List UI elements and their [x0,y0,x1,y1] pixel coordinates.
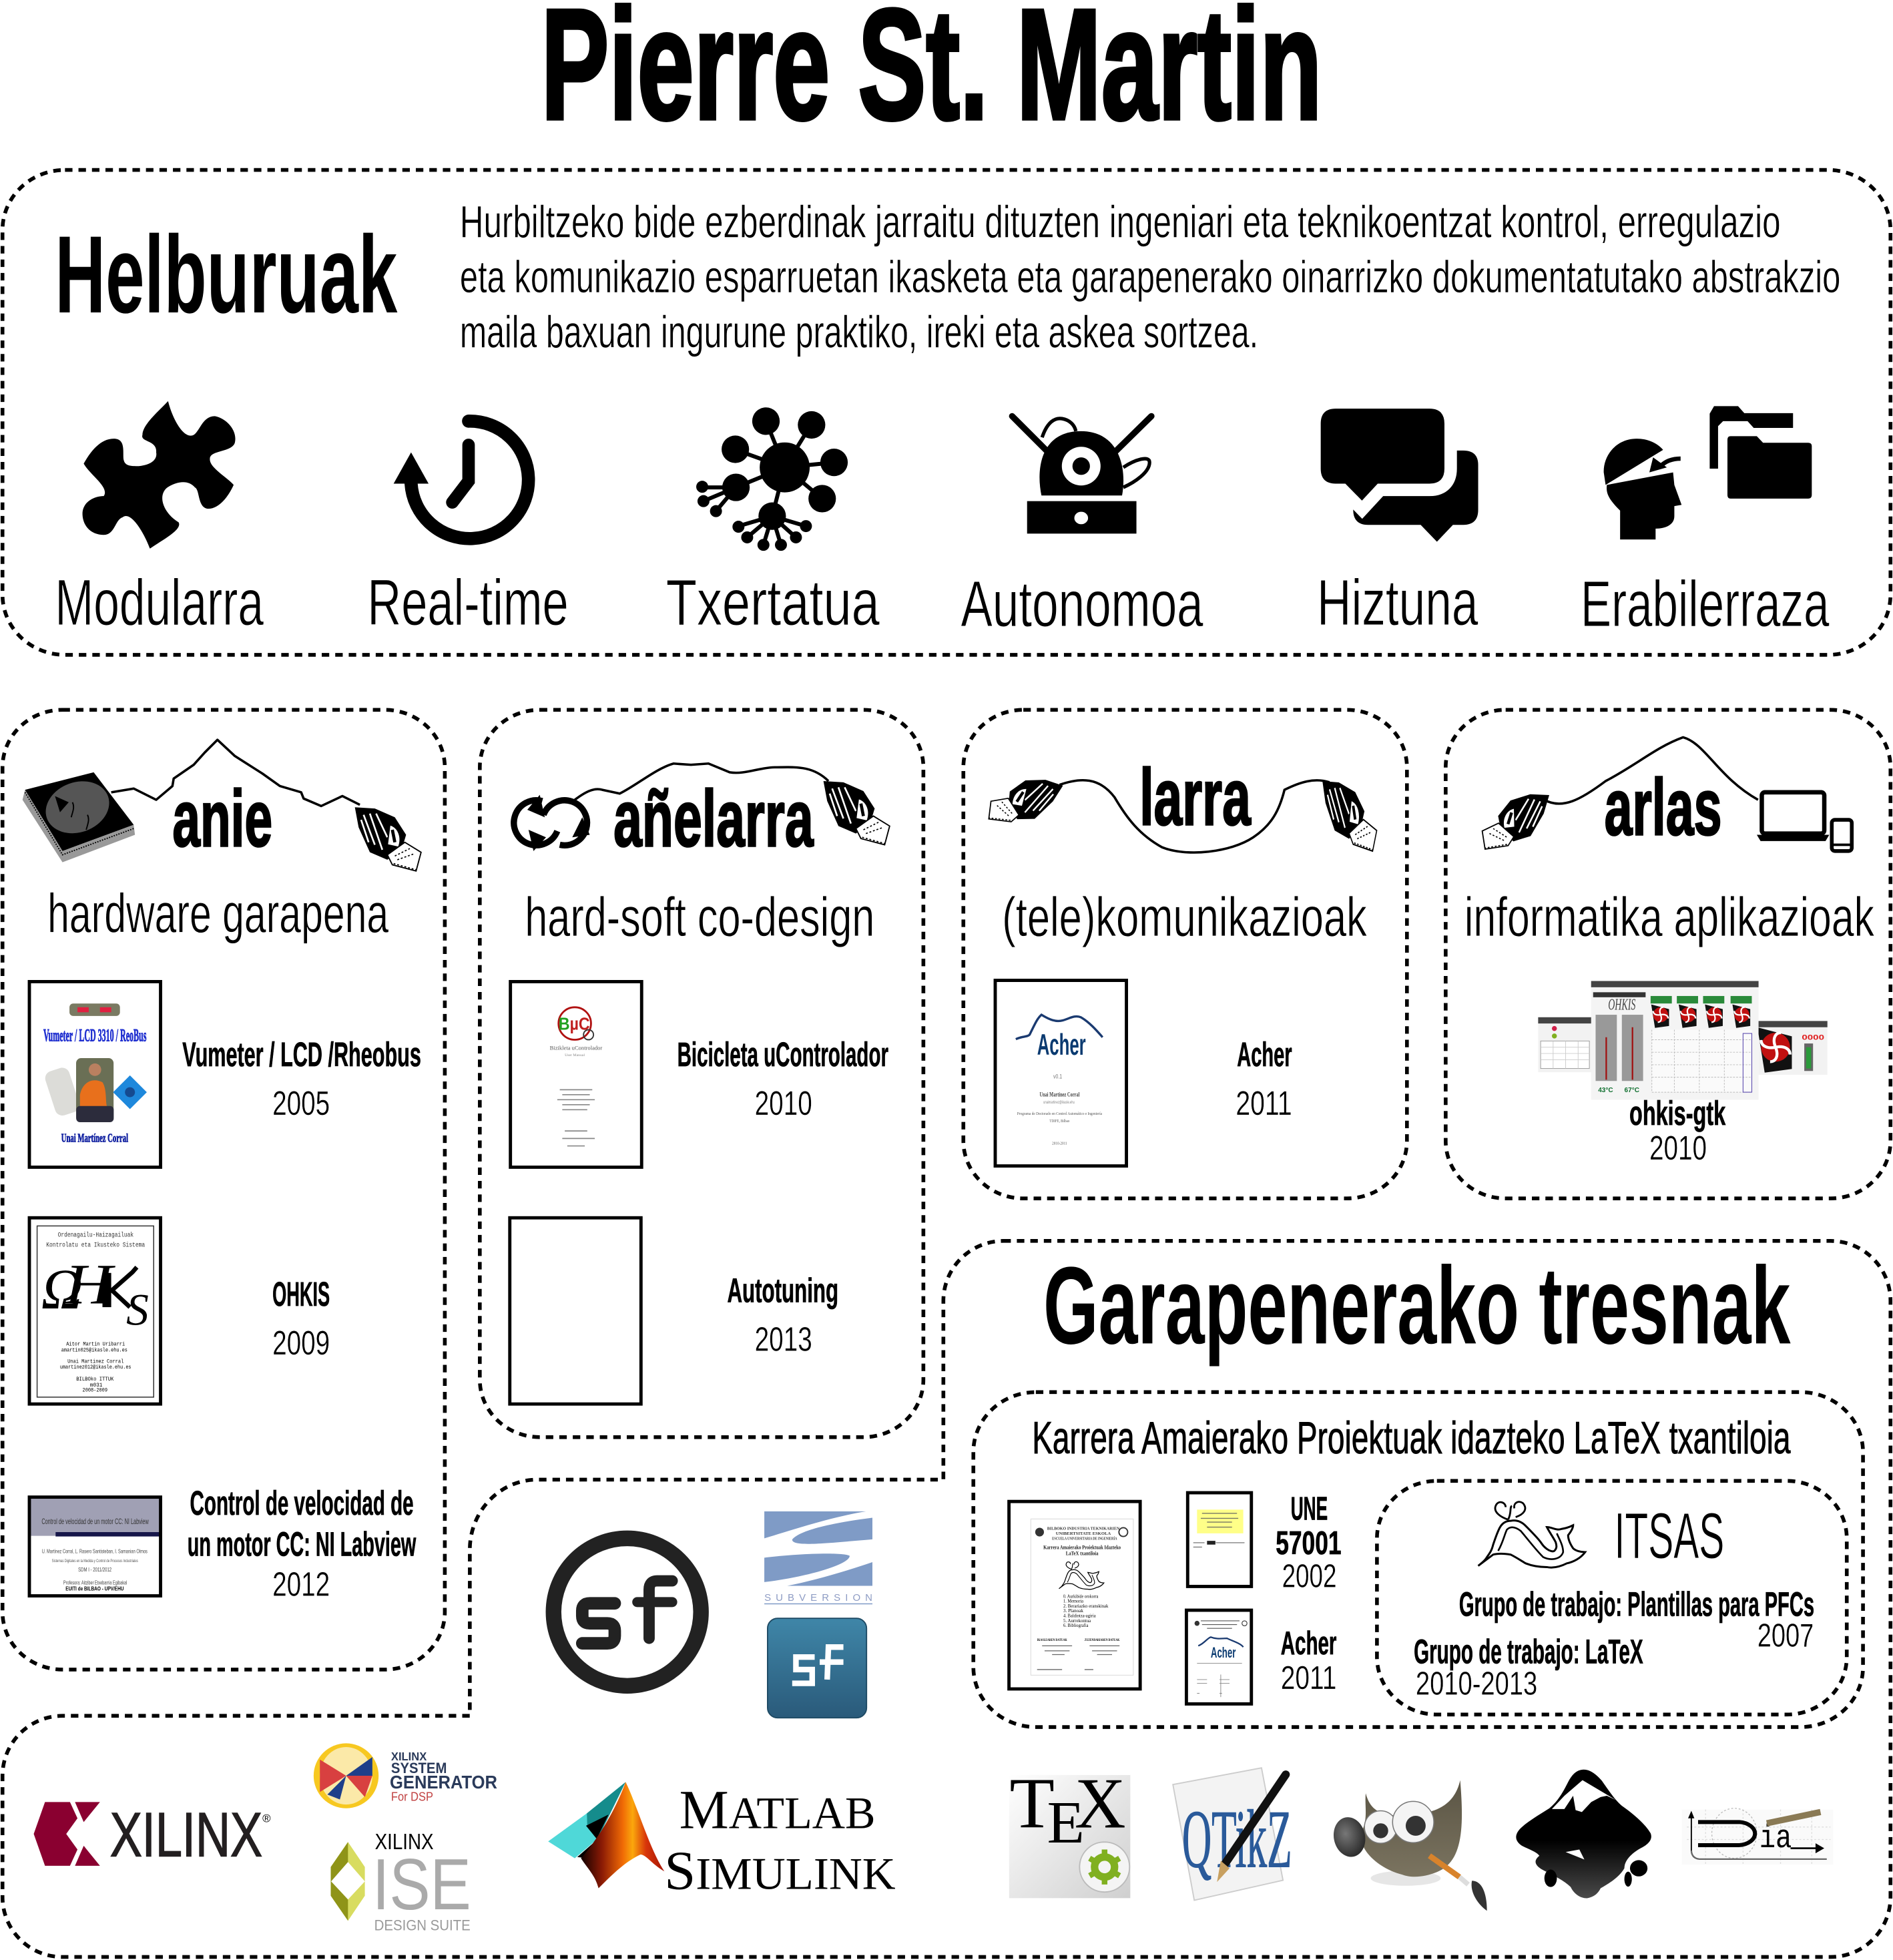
panel: arlas [1446,710,1890,1198]
icon: connector plug left [1480,788,1549,855]
text: 2010-2013: 2010-2013 [1416,1666,1537,1702]
logo: Xilinx: ® [262,1812,271,1824]
subheading: hardware garapena: hardware garapena [47,883,388,944]
item label: Vumeter: Vumeter / LCD /Rheobus [182,1035,421,1073]
screenshot: ohkis-gtk [1538,981,1828,1099]
item label: Acher: Acher [1281,1626,1336,1662]
book cover: Bicicleta uControlador [511,981,641,1167]
book cover: OHKIS: Ω [41,1257,83,1321]
cable: añelarra [575,764,828,800]
book cover: Vumeter: Unai Martínez Corral [61,1132,128,1145]
logo: TeX [1009,1764,1130,1898]
icon: chip [23,772,135,863]
icon: robot [1012,416,1151,533]
item label: Vumeter: 2005 [272,1084,330,1122]
logo: TeX: E [1047,1790,1085,1856]
screenshot: ohkis-gtk: 43°C [1598,1087,1613,1094]
document: large template page: 0. Aurkibide orokorra [1063,1594,1099,1599]
icon: clock with arrow [394,421,529,539]
icon: head and folders [1604,406,1812,539]
item label: Bicicleta uControlador: 2010 [755,1084,812,1122]
labels: feature names [55,566,1830,640]
document: large template page: LaTeX txantiloia [1066,1550,1099,1557]
logo: Matlab Simulink: MATLAB [680,1779,875,1840]
book cover: Bicicleta uControlador: B [559,1014,570,1034]
book cover: Vumeter [29,981,161,1167]
book cover: Acher: Unai Martinez Corral [1039,1092,1080,1099]
icon: network nodes [696,407,848,551]
logo: TeX: T [1010,1764,1055,1844]
heading: añelarra: añelarra [613,774,814,863]
icon: connector plug [355,807,421,871]
document: UNE page [1187,1493,1252,1586]
logo: Xilinx System Generator: XILINX [391,1750,427,1763]
logo: Xilinx System Generator: SYSTEM [391,1760,447,1776]
book cover: Control de velocidad: U. Martínez Corral, L. Rasero Santisteban, I. Samanian Olmos [42,1548,148,1554]
item label: Acher: 2011 [1281,1660,1336,1696]
book cover: OHKIS: umartinez012@ikasle.ehu.es [60,1364,131,1371]
item label: Acher [1281,1626,1336,1696]
book cover: OHKIS: S [126,1284,149,1334]
book cover: OHKIS: Ordenagailu-Haizagailuak [58,1231,133,1239]
item label: Bicicleta uControlador [678,1035,888,1122]
text: 2007: 2007 [1757,1618,1814,1654]
item label: Bicicleta uControlador: Bicicleta uControlador [678,1035,888,1073]
labels: feature names: Real-time [367,566,569,639]
item label: Control de velocidad: un motor CC: NI Labview [188,1525,417,1563]
item label: UNE 57001: 2002 [1282,1558,1336,1594]
book cover: Vumeter: Vumeter / LCD 3310 / ReoBus [43,1025,146,1045]
document: large template page: 4. Baldintza-agiria [1063,1614,1096,1619]
item label: Acher: 2011 [1236,1084,1292,1122]
book cover: Control de velocidad: Profesora: Aitziber Etxebarria Egibakal [63,1579,127,1585]
book cover: Bicicleta uControlador: µC [570,1014,590,1034]
subheading: (tele)komunikazioak: (tele)komunikazioak [1002,887,1368,948]
heading: anie: anie [172,774,272,863]
panel: anie [3,710,445,1670]
item label: OHKIS: 2009 [272,1324,330,1362]
item label: Autotuning: 2013 [755,1320,812,1359]
logo: Xilinx [34,1800,271,1870]
book cover: Control de velocidad: Control de velocidad de un motor CC: NI Labview [41,1517,149,1526]
book cover: OHKIS: 2008-2009 [83,1387,107,1393]
logo: Dia [1682,1808,1833,1865]
panel: Garapenerako tresnak [3,1241,1890,1957]
icon: laptop and phone [1757,792,1852,851]
book cover: OHKIS: m031 [90,1382,102,1389]
logo: Subversion: SUBVERSION [764,1592,872,1604]
document: Acher template page [1186,1610,1252,1704]
document: large template page: UNIBERTSITATE ESKOLA [1056,1531,1111,1536]
panel: larra [963,710,1407,1198]
item label: ohkis-gtk: 2010 [1649,1129,1707,1167]
text: LaTeX group: Grupo de trabajo: LaTeX [1414,1633,1643,1671]
document: large template page: IKASLEAREN DATUAK [1037,1638,1067,1642]
labels: feature names: Autonomoa [961,567,1203,640]
book cover: Bicicleta uControlador: User Manual [565,1053,585,1057]
text block: objectives [460,198,1840,357]
logo: Xilinx ISE: ISE [372,1845,471,1925]
panel: añelarra [480,710,923,1437]
document: large template page: 1. Memoria [1063,1599,1084,1604]
cable: anie [111,740,360,806]
document: large template page [1009,1501,1140,1689]
logo: Xilinx ISE [331,1830,471,1934]
icon: connector plug left [985,763,1063,840]
book cover: Acher: Acher [1037,1027,1086,1061]
item label: Acher [1236,1035,1292,1122]
panel: LaTeX template [973,1392,1863,1727]
book cover: Acher: 2010-2011 [1052,1142,1067,1146]
logo: Matlab Simulink [548,1779,896,1901]
icon: circular arrows [514,795,590,851]
logo: Xilinx ISE: DESIGN SUITE [374,1917,471,1934]
document: large template page: 3. Planoak [1063,1608,1083,1614]
item label: UNE 57001 [1276,1491,1342,1594]
labels: feature names: Hiztuna [1317,566,1478,639]
cable: larra [1059,780,1330,852]
heading: arlas: arlas [1605,763,1722,852]
item label: OHKIS [272,1275,330,1362]
item label: Autotuning [727,1272,838,1359]
logo: Matlab Simulink: SIMULINK [664,1840,896,1901]
icon: speech bubbles [1321,409,1478,542]
book cover: Acher: TDIFE, Bilbao [1049,1119,1070,1124]
item label: Acher: Acher [1237,1035,1292,1073]
logo: QTikZ [1173,1768,1292,1901]
logo: Xilinx ISE: XILINX [375,1830,434,1855]
book cover: OHKIS: BILBOko ITTUK [76,1376,114,1383]
book cover: OHKIS: H [64,1252,116,1316]
book cover: Acher [995,981,1127,1166]
panel: ITSAS [1377,1481,1847,1714]
book cover: OHKIS: amartin025@ikasle.ehu.es [61,1346,127,1353]
logo: Xilinx System Generator [314,1743,497,1808]
panel: Helburuak [3,170,1890,655]
logo: SourceForge blue square [768,1618,866,1718]
document: large template page: 6. Bibliografia [1063,1623,1089,1628]
book cover: OHKIS [29,1218,161,1404]
subheading: hard-soft co-design: hard-soft co-design [525,887,874,948]
item label: Control de velocidad: Control de velocidad de [190,1484,414,1522]
document: large template page: ZUZENDARIAREN DATUAK [1085,1638,1120,1642]
document: large template page: ESCUELA UNIVERSITARIA DE INGENIERÍA [1052,1535,1117,1541]
heading: ITSAS: ITSAS [1615,1499,1724,1572]
book cover: Control de velocidad: Sistemas Digitales en la Medida y Control de Procesos Industriales [52,1559,138,1563]
item label: Autotuning: Autotuning [727,1272,838,1310]
book cover: OHKIS: Unai Martinez Corral [67,1359,123,1365]
icon: puzzle piece [83,401,236,549]
labels: feature names: Txertatua [666,566,880,639]
icon: connector plug right [1322,781,1377,851]
screenshot: ohkis-gtk: 67°C [1625,1087,1640,1094]
document: large template page: BILBOKO INDUSTRIA TEKNIKARIEN [1047,1526,1120,1531]
item label: OHKIS: OHKIS [272,1275,330,1313]
book cover: Acher: v0.1 [1053,1073,1062,1080]
cable: arlas [1545,737,1758,804]
logo: Subversion [764,1511,872,1604]
logo: Xilinx: XILINX [110,1800,262,1870]
item label: Control de velocidad: 2012 [272,1565,330,1603]
logo: Xilinx System Generator: For DSP [391,1789,433,1803]
text block: objectives: maila baxuan ingurune praktiko, ireki eta askea sortzea. [460,307,1258,357]
book cover: Control de velocidad [29,1497,161,1596]
logo: SourceForge circle [553,1538,701,1686]
book cover: Autotuning (empty) [510,1218,641,1404]
item label: Vumeter [182,1035,421,1122]
logo: Xilinx System Generator: GENERATOR [390,1772,497,1792]
book cover: Acher: unaimartinez@ikasle.ehu [1043,1100,1075,1105]
screenshot: ohkis-gtk: OHKIS [1608,996,1635,1014]
document: large template page: 5. Aurrekontua [1063,1618,1091,1624]
panel: Garapenerako tresnak: QTikZ [1182,1794,1292,1885]
heading: Helburuak: Helburuak [55,213,398,336]
labels: feature names: Modularra [55,566,264,639]
book cover: Control de velocidad: EUITI de BILBAO - UPV/EHU [65,1585,124,1591]
logo: TeX: X [1075,1764,1126,1844]
book cover: Bicicleta uControlador: Bizikleta uControlador [550,1044,602,1051]
book cover: OHKIS: Aitor Martin Uribarri [66,1341,125,1348]
screenshot: ohkis-gtk: 0000 [1802,1033,1824,1041]
document: large template page: Karrera Amaierako Proiektuak Idazteko [1043,1543,1121,1550]
item label: ohkis-gtk [1629,1094,1726,1167]
item label: UNE 57001: 57001 [1276,1525,1342,1561]
item label: Control de velocidad [188,1484,417,1603]
book cover: Acher: Programa de Doctorado en Control Automático e Ingeniería [1017,1112,1102,1116]
logo: Inkscape [1516,1770,1651,1899]
logo: Dia: ia [1760,1820,1792,1857]
heading: larra: larra [1139,754,1252,842]
book cover: Control de velocidad: SDM I - 2011/2012 [78,1567,111,1573]
document: Acher template page: Acher [1211,1644,1236,1661]
icon: whale logo [1478,1502,1585,1567]
icon: connector plug [824,781,890,844]
logo: GIMP [1330,1780,1487,1911]
item label: ohkis-gtk: ohkis-gtk [1629,1094,1726,1132]
book cover: OHKIS: Kontrolatu eta Ikusteko Sistema [46,1242,145,1250]
item label: UNE 57001: UNE [1291,1491,1328,1527]
document: large template page: 2. Berariazko eranskinak [1063,1604,1109,1609]
